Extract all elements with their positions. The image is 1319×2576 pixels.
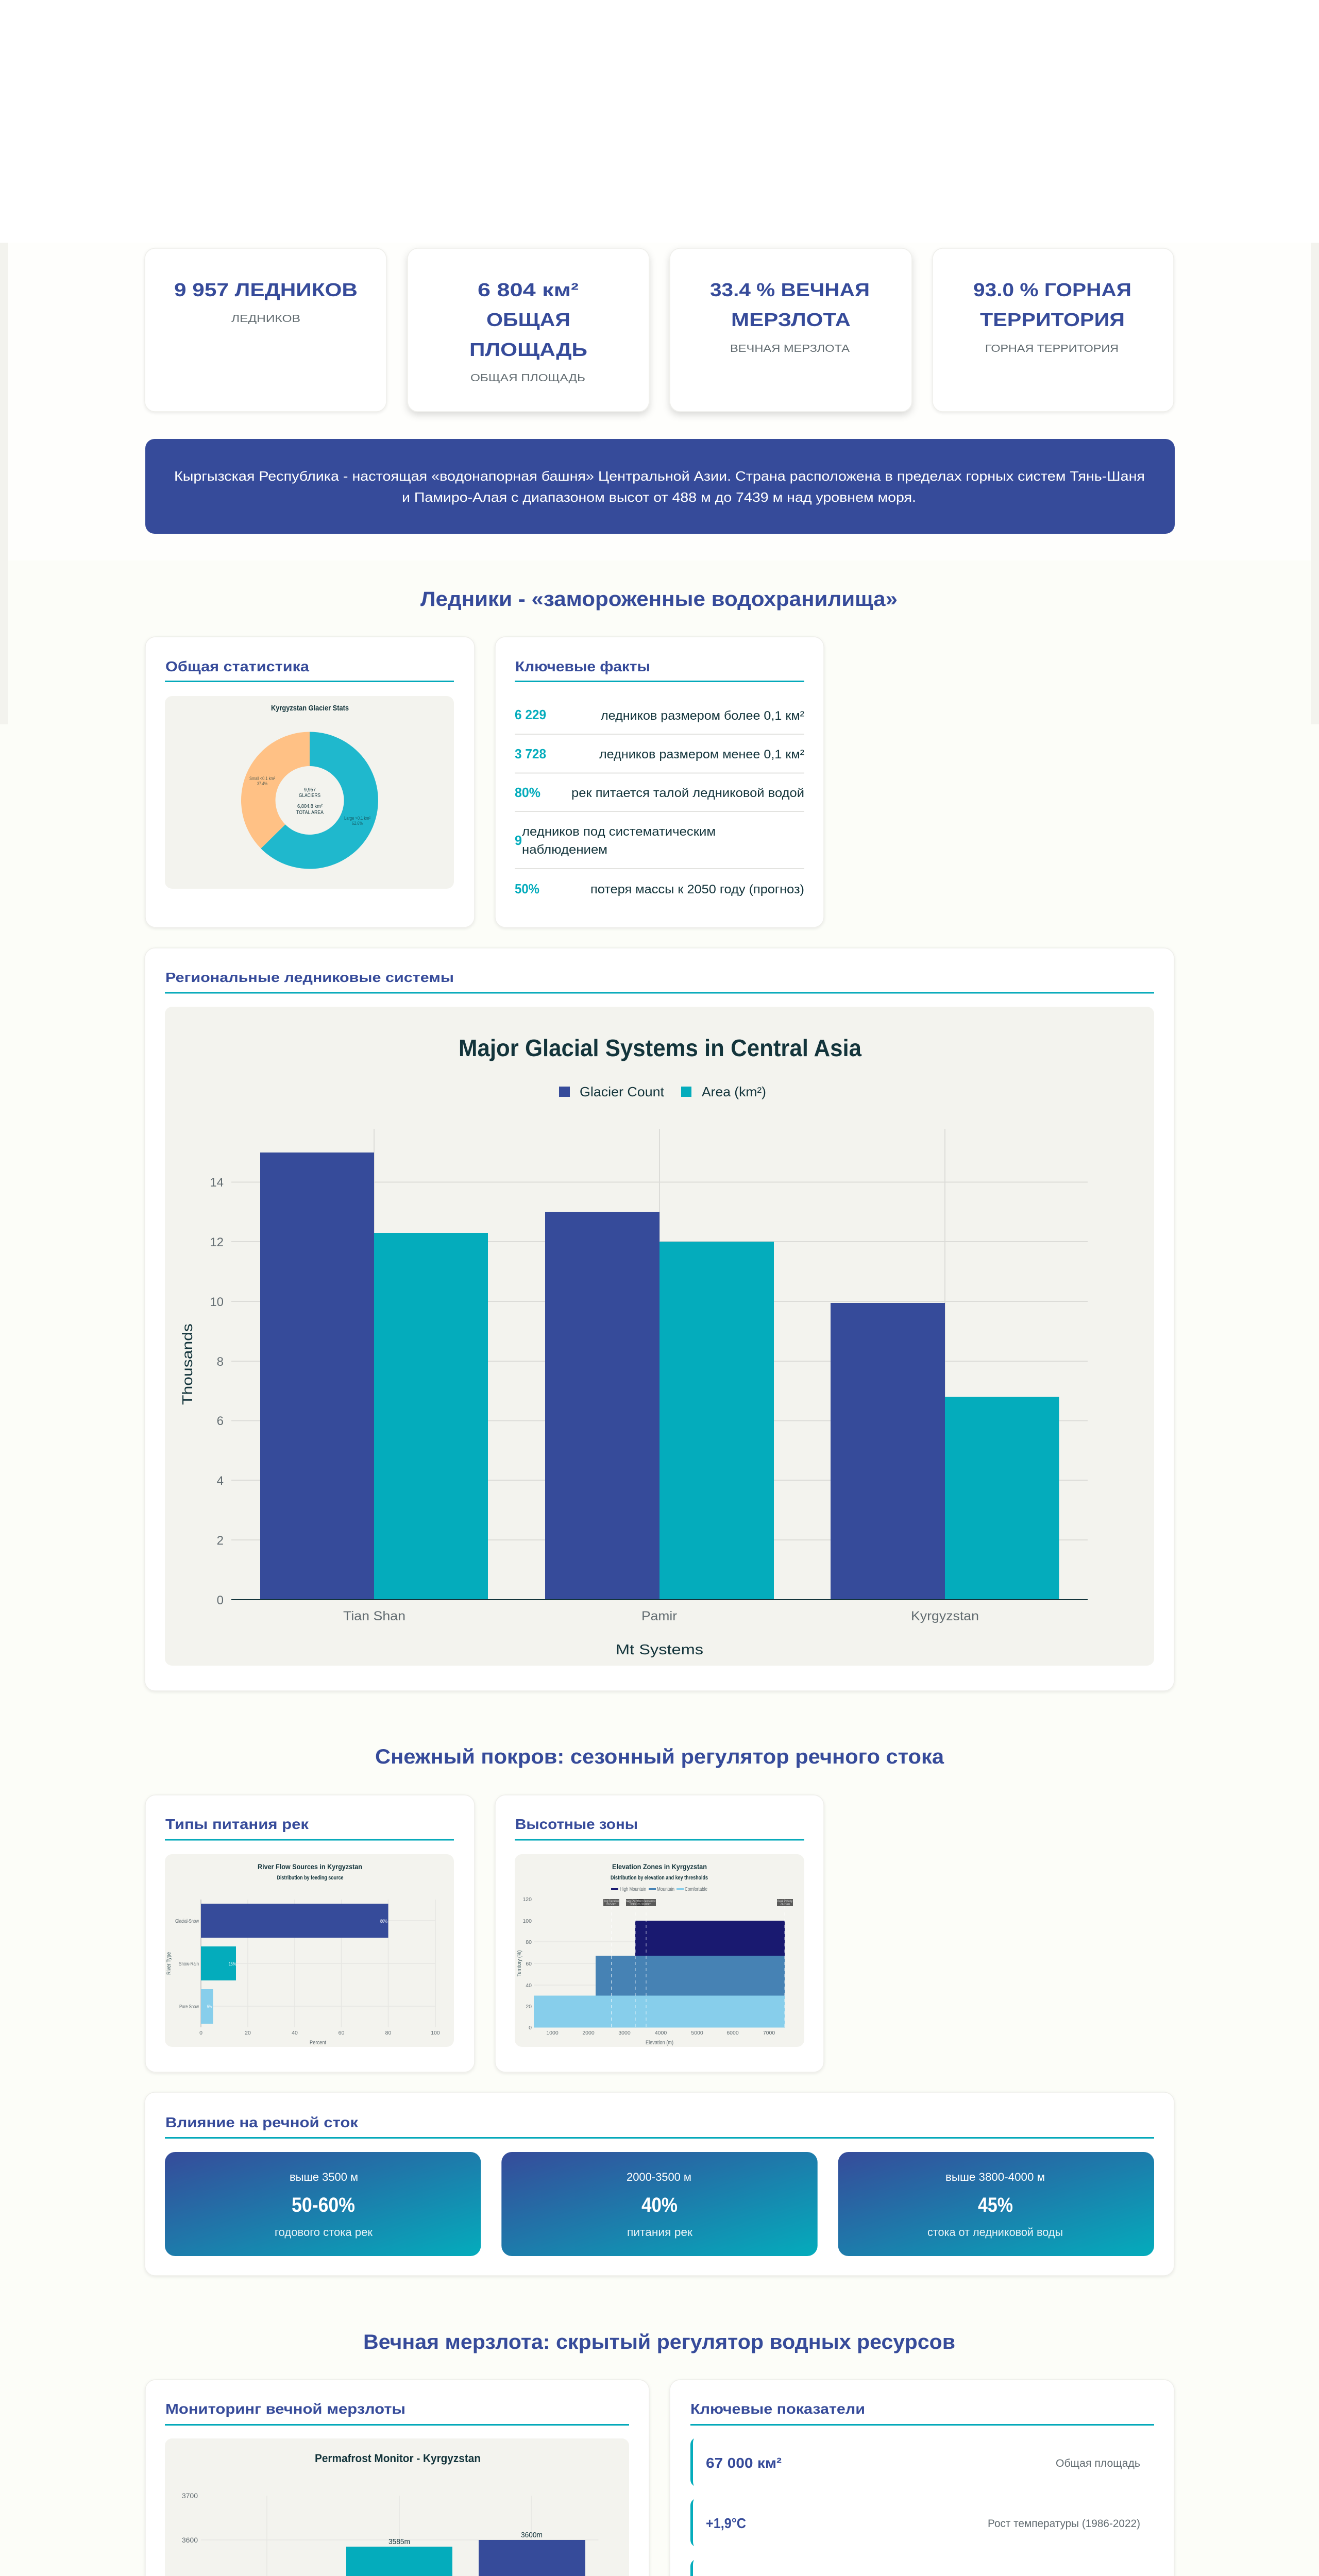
grouped bar chart: 10 — [210, 1295, 224, 1309]
horizontal bar chart: 5% — [207, 2004, 212, 2010]
fact: 9: ледников под систематическим — [522, 825, 716, 839]
stacked area chart — [515, 1854, 804, 2047]
fact: 6 229: ледников размером более 0,1 км² — [601, 709, 804, 723]
heading: snow cover: Снежный покров: сезонный регулятор речного стока — [375, 1745, 944, 1768]
stacked area chart: Frag Perm — [624, 1900, 639, 1903]
panel title: Типы питания рек — [165, 1816, 309, 1832]
heading: permafrost: Вечная мерзлота: скрытый регулятор водных ресурсов — [363, 2331, 955, 2353]
donut chart: TOTAL AREA — [296, 810, 324, 816]
metric: above 3500 m: 50-60% — [292, 2194, 355, 2216]
donut chart: GLACIERS — [299, 793, 320, 799]
panel: elevation zones — [495, 1795, 824, 2072]
stat card: total area: 6 804 км² — [478, 279, 579, 300]
stat card: permafrost: ВЕЧНАЯ МЕРЗЛОТА — [730, 343, 850, 354]
grouped bar chart: 0 — [217, 1594, 224, 1607]
fact: 9: наблюдением — [522, 843, 607, 857]
bar chart: Permafrost Monitor - Kyrgyzstan — [315, 2452, 481, 2465]
metric: above 3800-4000 m: стока от ледниковой воды — [927, 2226, 1063, 2239]
stacked area chart: 3300m — [630, 1903, 640, 1906]
fact: 3 728 — [515, 747, 804, 761]
donut chart: 62.6% — [352, 821, 363, 826]
stacked area chart: High Mountain — [620, 1887, 646, 1892]
intro banner: и Памиро-Алая с диапазоном высот от 488 м до 7439 м над уровнем моря. — [402, 490, 916, 505]
grouped bar chart: Pamir — [641, 1609, 677, 1623]
indicator: area — [690, 2438, 1140, 2486]
fact: 50%: потеря массы к 2050 году (прогноз) — [590, 883, 804, 896]
panel: key facts — [495, 637, 824, 927]
indicator: temperature — [690, 2499, 1140, 2546]
panel: river feed types — [145, 1795, 475, 2072]
indicator: area: Общая площадь — [1056, 2458, 1140, 2469]
stacked area chart: 40 — [526, 1982, 532, 1989]
stacked area chart: 7439m — [780, 1903, 790, 1906]
panel title: Высотные зоны — [515, 1816, 638, 1832]
stat card: permafrost: МЕРЗЛОТА — [731, 309, 851, 330]
stacked area chart: 3000 — [618, 2030, 631, 2036]
donut chart: 9,957 — [304, 787, 316, 793]
grouped bar chart: 2 — [217, 1534, 224, 1548]
grouped bar chart: Tian Shan — [343, 1609, 405, 1623]
horizontal bar chart: 100 — [431, 2030, 440, 2036]
indicator: temperature: Рост температуры (1986-2022) — [988, 2518, 1140, 2530]
indicator: temperature: +1,9°C — [706, 2515, 746, 2531]
grouped bar chart: Mt Systems — [616, 1641, 703, 1657]
stat card: total area: ПЛОЩАДЬ — [469, 339, 587, 360]
grouped bar chart: Kyrgyzstan — [911, 1609, 979, 1623]
stacked area chart: 100 — [522, 1918, 532, 1924]
fact: 50% — [515, 882, 804, 896]
stacked area chart: Distribution by elevation and key thresholds — [611, 1875, 708, 1881]
fact: 6 229 — [515, 708, 804, 723]
grouped bar chart: 6 — [217, 1414, 224, 1428]
horizontal bar chart: 80% — [380, 1919, 387, 1924]
stacked area chart: Mountain — [657, 1887, 674, 1892]
horizontal bar chart: 40 — [292, 2030, 298, 2036]
metric: 2000-3500 m: 2000-3500 м — [627, 2171, 691, 2183]
stacked area chart: 6000 — [726, 2030, 739, 2036]
stat card: mountain territory: 93.0 % ГОРНАЯ — [973, 279, 1131, 300]
horizontal bar chart — [165, 1854, 454, 2047]
grouped bar chart: 12 — [210, 1235, 224, 1249]
bar chart: 3700 — [182, 2492, 198, 2500]
horizontal bar chart: 20 — [245, 2030, 251, 2036]
donut chart: Large >0.1 km² — [344, 816, 370, 821]
donut chart: Small <0.1 km² — [249, 776, 275, 782]
panel title: Мониторинг вечной мерзлоты — [165, 2401, 405, 2417]
stat card: glaciers — [145, 248, 386, 412]
stacked area chart: Territory (%) — [516, 1951, 522, 1976]
fact: 9 — [515, 825, 716, 857]
panel title: Влияние на речной сток — [165, 2114, 359, 2130]
stat card: glaciers: ЛЕДНИКОВ — [231, 313, 300, 325]
stacked area chart: Avg Elevation — [604, 1900, 619, 1903]
horizontal bar chart: Glacial-Snow — [175, 1918, 199, 1924]
fact: 50%: 50% — [515, 882, 539, 896]
indicator: area: 67 000 км² — [706, 2455, 782, 2471]
stat card: permafrost: 33.4 % ВЕЧНАЯ — [710, 279, 870, 300]
stacked area chart: 20 — [526, 2004, 532, 2010]
stacked area chart: Cont Permafrost — [637, 1900, 655, 1903]
metric: 2000-3500 m: питания рек — [627, 2226, 692, 2239]
grouped bar chart: Glacier Count — [580, 1084, 665, 1099]
donut chart — [165, 696, 454, 889]
panel title: Общая статистика — [165, 658, 309, 674]
stacked area chart: 0 — [529, 2025, 532, 2031]
fact: 9: 9 — [515, 834, 522, 848]
stacked area chart: Comfortable — [685, 1887, 707, 1892]
stat card: mountain territory: ГОРНАЯ ТЕРРИТОРИЯ — [985, 343, 1119, 354]
metric: above 3500 m — [165, 2152, 481, 2256]
stat card: mountain territory: ТЕРРИТОРИЯ — [980, 309, 1125, 330]
stacked area chart: 2650m — [606, 1903, 616, 1906]
stat card: glaciers: 9 957 ЛЕДНИКОВ — [174, 279, 358, 300]
stacked area chart: 7000 — [763, 2030, 775, 2036]
horizontal bar chart: 80 — [385, 2030, 391, 2036]
grouped bar chart: 4 — [217, 1474, 224, 1488]
stacked area chart: Elevation Zones in Kyrgyzstan — [612, 1862, 707, 1871]
panel: regional glacier systems — [145, 948, 1174, 1691]
grouped bar chart: Area (km²) — [702, 1084, 766, 1099]
stacked area chart: 60 — [526, 1961, 532, 1967]
grouped bar chart: Major Glacial Systems in Central Asia — [459, 1035, 861, 1061]
bar chart — [165, 2438, 629, 2576]
horizontal bar chart: Snow-Rain — [179, 1961, 199, 1967]
stat card: total area — [408, 248, 649, 412]
horizontal bar chart: River Type — [166, 1952, 172, 1975]
horizontal bar chart: 60 — [339, 2030, 344, 2036]
horizontal bar chart: 15% — [229, 1961, 236, 1967]
stacked area chart: 5000 — [691, 2030, 703, 2036]
panel: key indicators — [670, 2380, 1174, 2576]
donut chart: 6,804.8 km² — [297, 804, 323, 809]
grouped bar chart: 14 — [210, 1176, 224, 1190]
metric: above 3500 m: выше 3500 м — [290, 2171, 358, 2183]
panel: general statistics — [145, 637, 475, 927]
horizontal bar chart: Distribution by feeding source — [277, 1875, 343, 1881]
stacked area chart: 3600m — [641, 1903, 651, 1906]
fact: 3 728: 3 728 — [515, 747, 546, 761]
donut chart: 37.4% — [257, 781, 267, 787]
panel title: Региональные ледниковые системы — [165, 970, 454, 985]
fact: 6 229: 6 229 — [515, 708, 546, 722]
horizontal bar chart: Percent — [310, 2040, 326, 2046]
horizontal bar chart: 0 — [199, 2030, 202, 2036]
indicator: station — [690, 2560, 1141, 2576]
stacked area chart: Peak Pobedy — [777, 1900, 793, 1903]
panel title: Ключевые показатели — [690, 2401, 865, 2417]
metric: above 3800-4000 m — [838, 2152, 1154, 2256]
stacked area chart: 1000 — [546, 2030, 559, 2036]
fact: 3 728: ледников размером менее 0,1 км² — [599, 748, 804, 761]
bar chart: 3600 — [182, 2536, 198, 2544]
stat card: mountain territory — [933, 248, 1174, 412]
stacked area chart: Elevation (m) — [646, 2040, 673, 2046]
stat card: total area: ОБЩАЯ — [486, 309, 570, 330]
stacked area chart: 120 — [522, 1896, 532, 1903]
grouped bar chart — [165, 1007, 1154, 1666]
stacked area chart: 2000 — [582, 2030, 595, 2036]
stat card: total area: ОБЩАЯ ПЛОЩАДЬ — [470, 372, 585, 384]
grouped bar chart: Thousands — [179, 1324, 195, 1405]
metric: above 3800-4000 m: 45% — [978, 2194, 1013, 2216]
intro banner — [145, 439, 1175, 534]
heading: glaciers: Ледники - «замороженные водохранилища» — [420, 588, 898, 611]
horizontal bar chart: Pure Snow — [179, 2004, 199, 2010]
metric: above 3500 m: годового стока рек — [275, 2226, 373, 2239]
panel: permafrost monitoring — [145, 2380, 649, 2576]
bar chart: 3600m — [521, 2531, 543, 2539]
metric: above 3800-4000 m: выше 3800-4000 м — [945, 2171, 1045, 2183]
metric: 2000-3500 m: 40% — [641, 2194, 678, 2216]
fact: 80%: 80% — [515, 786, 540, 800]
stacked area chart: 4000 — [655, 2030, 667, 2036]
bar chart: 3585m — [388, 2537, 410, 2546]
donut chart: Kyrgyzstan Glacier Stats — [271, 704, 349, 713]
horizontal bar chart: River Flow Sources in Kyrgyzstan — [258, 1862, 362, 1871]
stacked area chart: 80 — [526, 1939, 532, 1945]
stat card: permafrost — [670, 248, 912, 412]
metric: 2000-3500 m — [501, 2152, 818, 2256]
panel title: Ключевые факты — [515, 658, 650, 674]
intro banner: Кыргызская Республика - настоящая «водонапорная башня» Центральной Азии. Страна расположена в пределах горных систем Тянь-Шаня — [174, 469, 1145, 484]
grouped bar chart: 8 — [217, 1355, 224, 1369]
panel: river flow impact — [145, 2092, 1174, 2276]
fact: 80%: рек питается талой ледниковой водой — [571, 786, 804, 800]
